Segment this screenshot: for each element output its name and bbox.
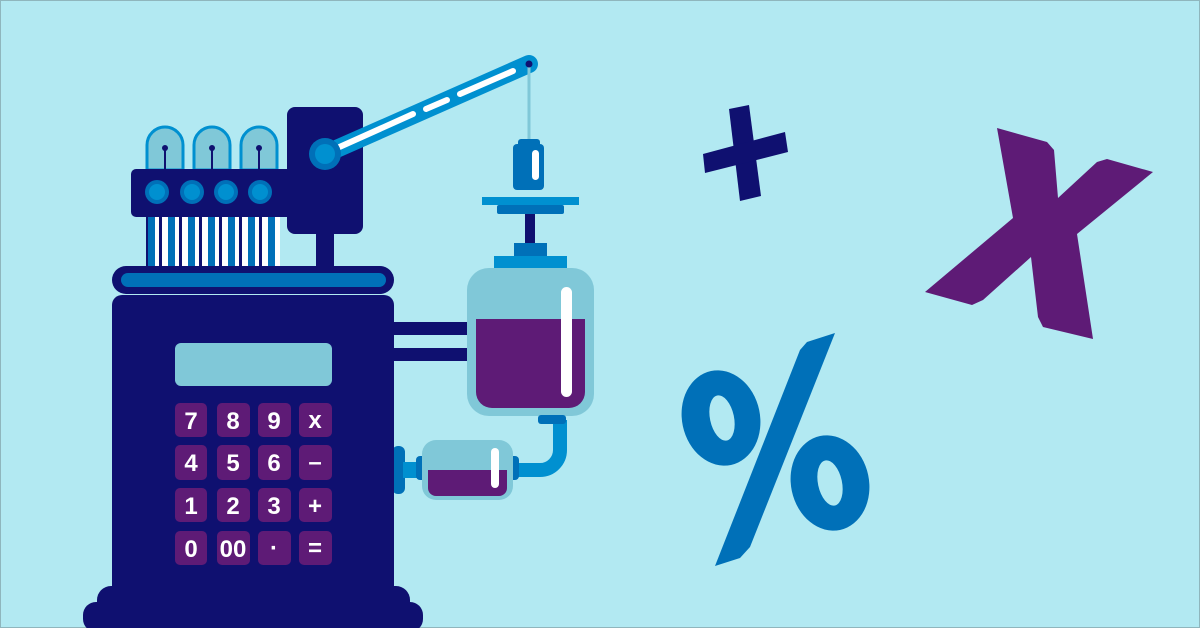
calculator keypad: 8 bbox=[226, 408, 240, 435]
pipes machine to tank bbox=[392, 322, 470, 361]
small tank bbox=[392, 440, 513, 500]
calculator keypad: 1 bbox=[184, 493, 198, 520]
big tank bbox=[467, 268, 594, 416]
bulbs bbox=[147, 127, 277, 170]
icon: multiply sign bbox=[925, 128, 1153, 339]
calculator keypad: 5 bbox=[226, 450, 240, 477]
vial bbox=[513, 139, 544, 190]
calculator keypad: 3 bbox=[267, 493, 281, 520]
calculator keypad bbox=[175, 403, 332, 565]
calculator keypad: 00 bbox=[220, 536, 246, 563]
crane arm bbox=[309, 60, 532, 170]
icon: percent sign bbox=[673, 333, 878, 566]
curved pipe bbox=[505, 415, 566, 480]
calculator keypad: · bbox=[270, 535, 278, 562]
machine body bbox=[83, 295, 423, 628]
calculator keypad: = bbox=[308, 535, 322, 562]
calculator keypad: 7 bbox=[184, 408, 198, 435]
calculator keypad: 4 bbox=[184, 450, 198, 477]
control box bbox=[131, 169, 301, 217]
calculator keypad: 9 bbox=[267, 408, 281, 435]
calculator keypad: 6 bbox=[267, 450, 281, 477]
calculator display bbox=[175, 343, 332, 386]
calculator keypad: – bbox=[308, 449, 322, 476]
calculator keypad: 0 bbox=[184, 536, 198, 563]
calculator keypad: x bbox=[308, 407, 322, 434]
icon: plus sign bbox=[703, 105, 788, 201]
calculator keypad: + bbox=[308, 493, 322, 520]
calculator keypad: 2 bbox=[226, 493, 240, 520]
base rail bbox=[112, 266, 394, 294]
stripes below control box bbox=[146, 215, 280, 268]
platform and stand bbox=[482, 197, 579, 269]
post and motor box bbox=[287, 107, 363, 270]
